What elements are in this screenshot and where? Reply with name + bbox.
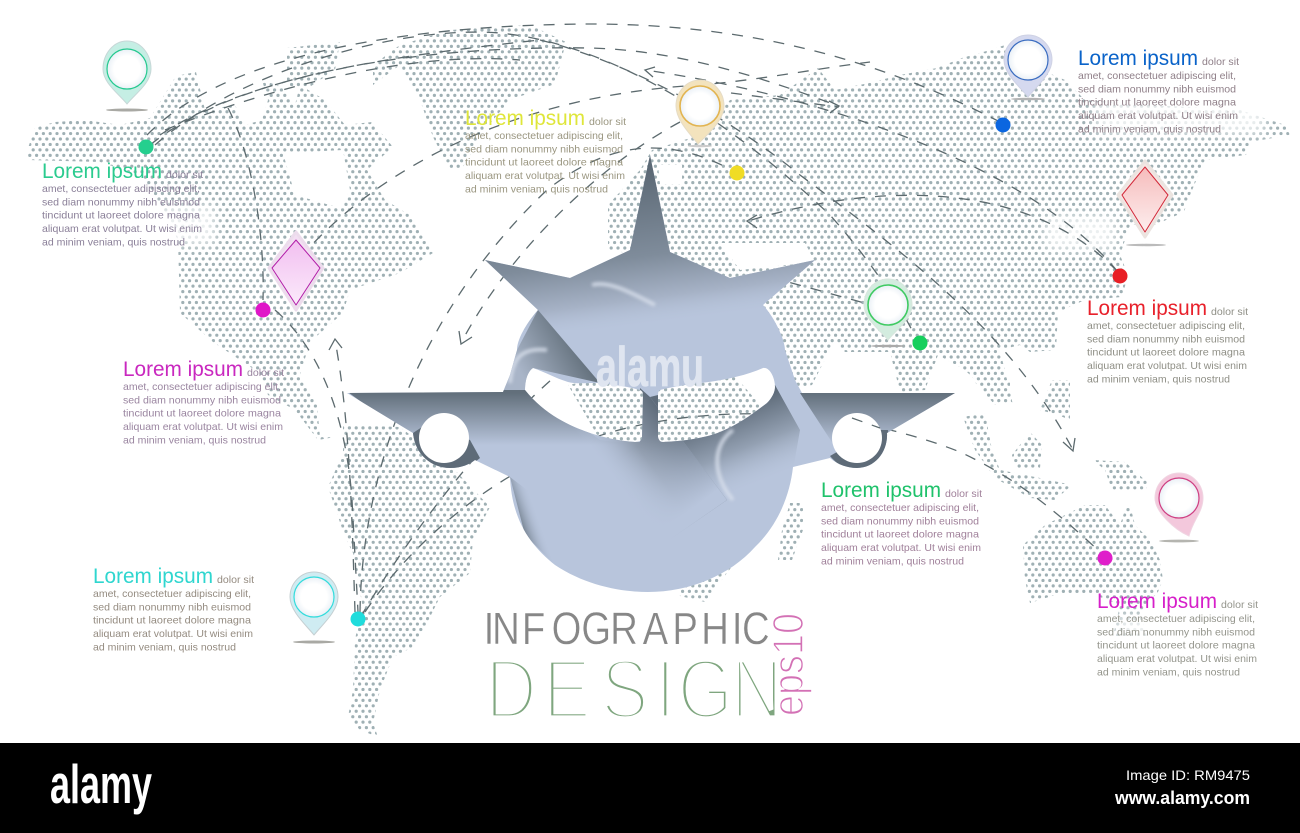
right engine shadow	[830, 430, 888, 470]
title: infographic: INFOGRAPHIC	[484, 603, 770, 654]
pin: blue asia	[1004, 35, 1052, 100]
text block: green lower: Lorem ipsum	[821, 479, 941, 502]
pin body	[103, 41, 151, 104]
text block: magenta left: ad minim veniam, quis nostrud	[123, 434, 266, 446]
pin ring	[294, 577, 334, 617]
diamond inner	[272, 240, 320, 305]
text block: red	[1087, 297, 1248, 385]
text block: red: ad minim veniam, quis nostrud	[1087, 373, 1230, 385]
pin ring	[107, 49, 147, 89]
text block: red: tincidunt ut laoreet dolore magna	[1087, 347, 1245, 359]
diamond shadow	[1126, 244, 1166, 246]
map: eurasia	[608, 45, 1290, 405]
pin: green india	[864, 279, 912, 347]
text block: magenta lower right: aliquam erat volutpat. Ut wisi enim	[1097, 653, 1257, 665]
map: madagascar	[778, 503, 803, 560]
text block: cyan: amet, consectetuer adipiscing elit,	[93, 588, 251, 600]
text block: yellow: aliquam erat volutpat. Ut wisi enim	[465, 170, 625, 182]
text block: red: dolor sit	[1211, 306, 1248, 318]
pin body	[676, 80, 724, 144]
text block: green upper left	[42, 160, 203, 248]
pin shadow	[688, 145, 712, 147]
text block: yellow	[465, 107, 626, 195]
text block: blue: Lorem ipsum	[1078, 47, 1198, 70]
map: philippines	[1040, 380, 1070, 420]
map: java and borneo	[1012, 432, 1042, 468]
text block: green lower: dolor sit	[945, 488, 982, 500]
text block: green lower: amet, consectetuer adipiscing elit,	[821, 502, 979, 514]
footer logo: alamy	[50, 753, 152, 815]
text block: magenta lower right: dolor sit	[1221, 599, 1258, 611]
text block: yellow: tincidunt ut laoreet dolore magna	[465, 157, 623, 169]
route over right engine	[852, 418, 880, 428]
text block: magenta lower right: Lorem ipsum	[1097, 590, 1217, 613]
map fades behind text	[145, 100, 1265, 645]
text block: blue	[1078, 47, 1239, 135]
text block: green lower: aliquam erat volutpat. Ut wisi enim	[821, 542, 981, 554]
pin: green north america	[103, 41, 151, 112]
route arrowheads	[329, 67, 1075, 451]
text block: blue: amet, consectetuer adipiscing elit,	[1078, 70, 1236, 82]
text block: red: amet, consectetuer adipiscing elit,	[1087, 320, 1245, 332]
title: eps10: eps10	[764, 613, 813, 716]
map: arctic islands	[287, 42, 340, 90]
map: inland sea, mediterranean	[720, 243, 815, 270]
right engine opening	[832, 413, 882, 463]
text block: green upper left: Lorem ipsum	[42, 160, 162, 183]
pin body	[864, 279, 912, 340]
diamond inner	[1122, 167, 1168, 232]
plane body	[347, 155, 955, 592]
text block: green lower	[821, 479, 982, 567]
text block: yellow: sed diam nonummy nibh euismod	[465, 143, 623, 155]
text block: cyan: tincidunt ut laoreet dolore magna	[93, 615, 251, 627]
footer bar	[0, 743, 1300, 833]
map: hudson bay	[283, 150, 350, 208]
pin body	[1004, 35, 1052, 97]
map: greenland	[373, 25, 566, 170]
diamond outer	[269, 232, 323, 310]
pin body	[1155, 473, 1203, 536]
text block: blue: dolor sit	[1202, 56, 1239, 68]
text block: blue: tincidunt ut laoreet dolore magna	[1078, 97, 1236, 109]
pin shadow	[1011, 98, 1045, 100]
text block: magenta left: dolor sit	[247, 367, 284, 379]
text block: magenta lower right: ad minim veniam, quis nostrud	[1097, 666, 1240, 678]
text block: magenta left	[123, 358, 284, 446]
plane watermark: alamu	[596, 335, 704, 398]
text block: red: sed diam nonummy nibh euismod	[1087, 333, 1245, 345]
text block: blue: aliquam erat volutpat. Ut wisi enim	[1078, 110, 1238, 122]
diamond outer	[1118, 161, 1172, 237]
pin shadow	[293, 640, 335, 644]
text block: yellow: ad minim veniam, quis nostrud	[465, 183, 608, 195]
text block: cyan: Lorem ipsum	[93, 565, 213, 588]
text block: yellow: Lorem ipsum	[465, 107, 585, 130]
text block: yellow: dolor sit	[589, 116, 626, 128]
dot: blue	[996, 118, 1010, 132]
text block: magenta left: sed diam nonummy nibh euismod	[123, 394, 281, 406]
text block: magenta left: Lorem ipsum	[123, 358, 243, 381]
plane shading	[345, 150, 960, 565]
text block: green upper left: tincidunt ut laoreet dolore magna	[42, 210, 200, 222]
map: north america	[28, 72, 433, 440]
text block: magenta left: aliquam erat volutpat. Ut wisi enim	[123, 421, 283, 433]
map: south-east asian islands	[963, 413, 1072, 500]
pin ring	[680, 86, 720, 126]
plane highlight sweeps	[510, 284, 733, 500]
pin shadow	[1159, 540, 1199, 542]
pin shadow	[106, 108, 148, 112]
text block: green upper left: amet, consectetuer adipiscing elit,	[42, 183, 200, 195]
text block: magenta left: tincidunt ut laoreet dolore magna	[123, 408, 281, 420]
text block: cyan: ad minim veniam, quis nostrud	[93, 641, 236, 653]
pin body	[290, 572, 338, 635]
map: africa	[568, 370, 790, 602]
text block: cyan	[93, 565, 254, 653]
pin: yellow europe	[676, 80, 724, 147]
footer image id: Image ID: RM9475	[1126, 767, 1250, 783]
text block: green lower: sed diam nonummy nibh euismod	[821, 515, 979, 527]
location dots	[138, 118, 1128, 626]
map: australia	[1023, 505, 1163, 636]
text block: cyan: aliquam erat volutpat. Ut wisi enim	[93, 628, 253, 640]
dot: magenta	[256, 302, 270, 318]
footer background	[0, 743, 1300, 833]
dot: yellow	[730, 166, 744, 180]
text block: green upper left: aliquam erat volutpat. Ut wisi enim	[42, 223, 202, 235]
pin: cyan south america	[290, 572, 338, 644]
text block: red: Lorem ipsum	[1087, 297, 1207, 320]
text block: cyan: sed diam nonummy nibh euismod	[93, 601, 251, 613]
map: indochina tip	[973, 380, 1010, 405]
text block: magenta lower right	[1097, 590, 1258, 678]
title	[484, 603, 813, 736]
text block: green lower: ad minim veniam, quis nostrud	[821, 555, 964, 567]
text block: magenta lower right: tincidunt ut laoreet dolore magna	[1097, 640, 1255, 652]
dot: green	[138, 140, 154, 154]
dot: cyan	[350, 612, 366, 626]
dot: green india	[912, 336, 928, 350]
dot: purple	[1098, 550, 1112, 566]
diamond marker: red	[1118, 161, 1172, 246]
flight routes	[147, 24, 1118, 618]
title: design: DESIGN	[485, 641, 783, 736]
text block: magenta left: amet, consectetuer adipiscing elit,	[123, 381, 281, 393]
left engine shadow	[413, 428, 480, 468]
left engine opening	[419, 413, 469, 463]
text block: blue: sed diam nonummy nibh euismod	[1078, 83, 1236, 95]
text block: yellow: amet, consectetuer adipiscing elit,	[465, 130, 623, 142]
text block: blue: ad minim veniam, quis nostrud	[1078, 123, 1221, 135]
map: inland sea, north europe	[658, 165, 682, 184]
pin ring	[1159, 478, 1199, 518]
text block: magenta lower right: amet, consectetuer adipiscing elit,	[1097, 613, 1255, 625]
text block: magenta lower right: sed diam nonummy nibh euismod	[1097, 626, 1255, 638]
footer website: www.alamy.com	[1114, 788, 1250, 808]
dot: red	[1112, 268, 1128, 284]
text block: cyan: dolor sit	[217, 574, 254, 586]
text block: green upper left: ad minim veniam, quis nostrud	[42, 236, 185, 248]
airplane	[345, 150, 960, 592]
text block: green upper left: dolor sit	[166, 169, 203, 181]
map: new guinea	[1093, 460, 1147, 490]
pin ring	[868, 285, 908, 325]
text block: green upper left: sed diam nonummy nibh euismod	[42, 196, 200, 208]
pin: pink australia	[1155, 473, 1203, 542]
diamond marker: magenta	[269, 232, 323, 310]
map: south america	[328, 425, 490, 737]
text block: green lower: tincidunt ut laoreet dolore magna	[821, 529, 979, 541]
pin ring	[1008, 40, 1048, 80]
text block: red: aliquam erat volutpat. Ut wisi enim	[1087, 360, 1247, 372]
pin shadow	[871, 345, 905, 347]
